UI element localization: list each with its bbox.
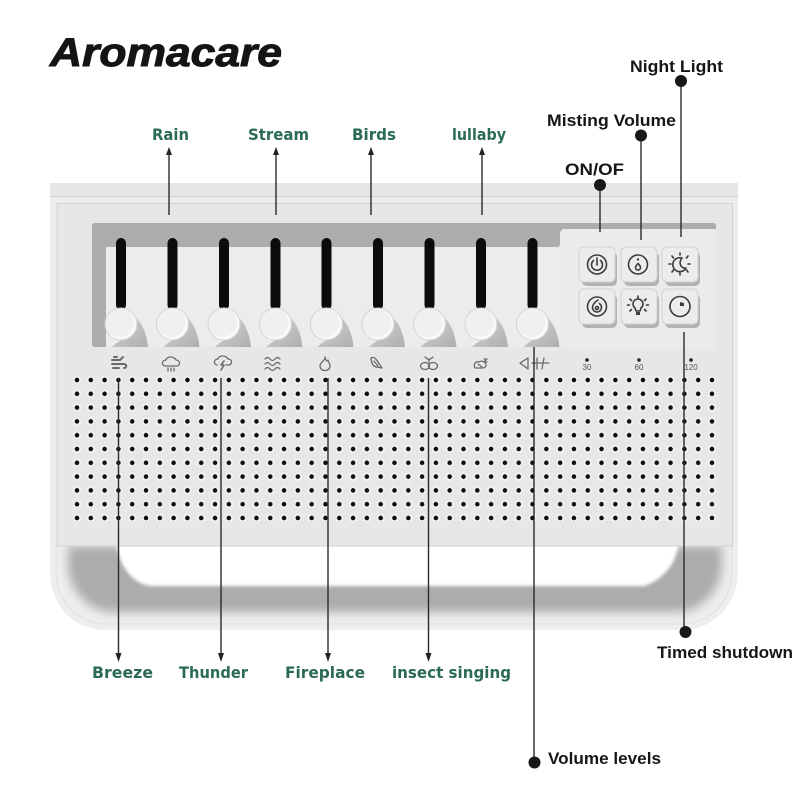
button: power: [579, 247, 617, 286]
arrow: lullaby: [479, 147, 485, 215]
timer mark 120: 120: [684, 363, 698, 372]
label: Stream: Stream: [248, 125, 309, 144]
arrow: insect singing: [426, 378, 432, 662]
label: ON/OF: ON/OF: [565, 161, 624, 179]
device body: [50, 183, 738, 630]
timer mark 120: [684, 358, 698, 372]
button: misting volume: [621, 247, 659, 286]
label: Misting Volume: Misting Volume: [547, 112, 676, 130]
leader: night light: [675, 75, 687, 237]
arrow: fireplace: [325, 378, 331, 662]
icon: thunder cloud: [214, 356, 232, 370]
handle grip: [68, 546, 722, 612]
icon: lullaby: [474, 359, 487, 368]
label: insect singing: insect singing: [392, 663, 511, 682]
timer mark 30: 30: [583, 363, 592, 372]
icon: stream waves: [265, 358, 280, 370]
leader: misting volume: [635, 130, 647, 240]
label: Volume levels: Volume levels: [548, 750, 661, 768]
label: Timed shutdown: Timed shutdown: [657, 644, 793, 662]
leader: on/off: [594, 179, 606, 232]
timer mark 60: [635, 358, 644, 372]
label: Birds: Birds: [352, 125, 396, 144]
arrow: rain: [166, 147, 172, 215]
speaker grille dots: [70, 373, 719, 525]
leader: timed shutdown: [680, 332, 692, 638]
sliders: [105, 238, 560, 347]
handle opening: [116, 540, 679, 586]
button: light bulb: [621, 289, 659, 328]
control buttons: [579, 247, 700, 328]
logo: Aromacare: [49, 31, 282, 75]
timer mark 60: 60: [635, 363, 644, 372]
top band: [50, 183, 738, 196]
front face: [50, 197, 738, 546]
arrow: stream: [273, 147, 279, 215]
icon: rain cloud: [162, 357, 180, 371]
label: lullaby: lullaby: [452, 125, 507, 144]
sound icons row: [112, 356, 698, 372]
icon: breeze: [112, 357, 126, 368]
label: Breeze: Breeze: [92, 663, 153, 682]
arrow: thunder: [218, 378, 224, 662]
label: Thunder: Thunder: [179, 663, 248, 682]
button: flame: [579, 289, 617, 328]
button: night light: [662, 247, 700, 286]
arrow: birds: [368, 147, 374, 215]
icon: insect: [420, 357, 438, 370]
icon: bird: [371, 357, 382, 368]
arrow: breeze: [116, 378, 122, 662]
label: Night Light: Night Light: [630, 58, 724, 76]
timer mark 30: [583, 358, 592, 372]
button: timer: [662, 289, 700, 328]
icon: fire: [320, 357, 330, 370]
icon: volume levels: [520, 358, 549, 369]
label: Rain: Rain: [152, 125, 189, 144]
label: Fireplace: Fireplace: [285, 663, 365, 682]
recessed slider panel: [92, 223, 716, 347]
leader: volume levels: [528, 347, 540, 768]
shell contour line: [56, 546, 732, 624]
handle shell: [50, 183, 738, 630]
